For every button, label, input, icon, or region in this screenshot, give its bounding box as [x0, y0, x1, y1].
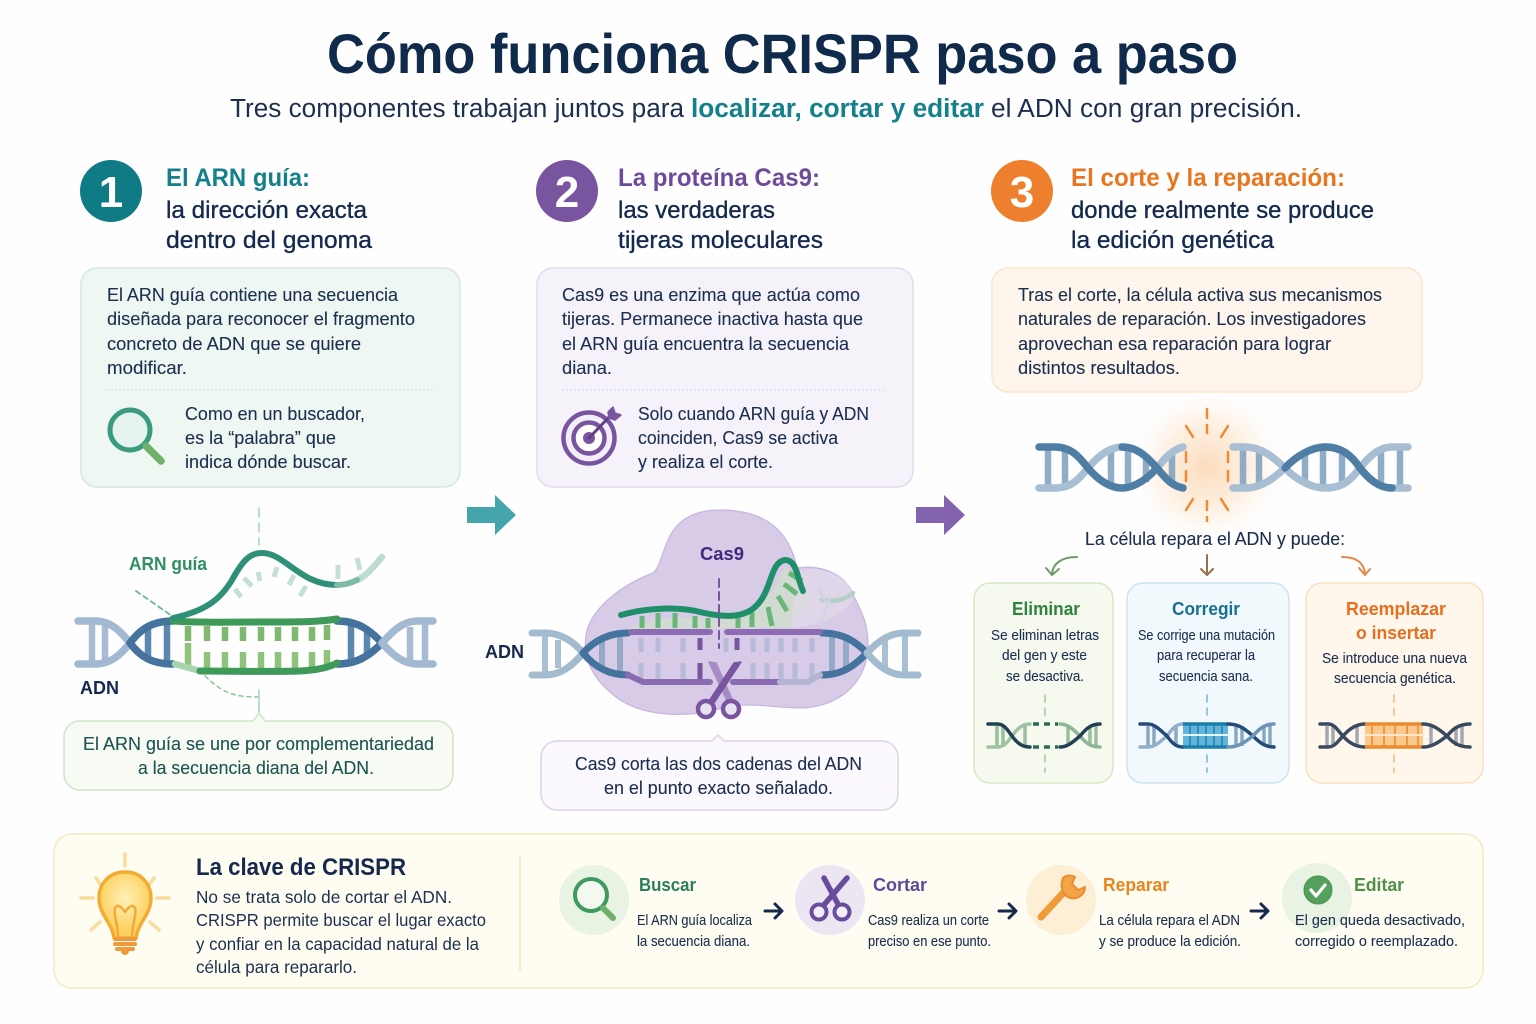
- cut marks: [1186, 409, 1228, 521]
- card: Eliminar: se desactiva.: [1006, 669, 1084, 685]
- ARN strand: [235, 558, 360, 597]
- card: Reemplazar: Se introduce una nueva: [1322, 651, 1468, 667]
- panel: ARN guía text: diseñada para reconocer el fragmento: [107, 308, 415, 329]
- step number 2: 2: [555, 168, 579, 217]
- arrow: to Eliminar: [1046, 557, 1077, 575]
- analogy text 2: Solo cuando ARN guía y ADN: [638, 403, 869, 424]
- heading 1: la dirección exacta: [166, 197, 368, 224]
- title: Cómo funciona CRISPR paso a paso: [327, 22, 1238, 85]
- left helix: [78, 621, 173, 664]
- icon: magnifier: [110, 410, 161, 461]
- panel: ARN guía text: concreto de ADN que se quiere: [107, 333, 361, 354]
- arrow: teal: [467, 495, 516, 535]
- label: ARN guía: ARN guía: [129, 554, 208, 574]
- callout 2: Cas9 corta las dos cadenas del ADN: [575, 753, 862, 774]
- card: Corregir: [1127, 583, 1289, 783]
- arrow: step 2 to 3: [999, 904, 1016, 918]
- analogy text 1: indica dónde buscar.: [185, 451, 351, 472]
- label: Cas9: Cas9: [700, 544, 744, 564]
- cut strands: [631, 629, 820, 635]
- panel: La clave de CRISPR: [54, 834, 1483, 988]
- diagram: Cas9 cutting ADN: [532, 510, 918, 717]
- green rungs: [188, 625, 327, 641]
- heading 2: [618, 164, 823, 254]
- card: Reemplazar: secuencia genética.: [1334, 671, 1456, 687]
- callout 1: [64, 713, 453, 790]
- internal rungs: [641, 638, 812, 680]
- icon: magnifier small: [575, 879, 613, 918]
- arrow: purple: [916, 495, 965, 535]
- icon: scissors: [812, 878, 850, 920]
- step number 3: [991, 160, 1053, 222]
- panel: Cas9 text: diana.: [562, 357, 612, 378]
- target strand: [173, 619, 337, 622]
- arrow: step 1 to 2: [765, 904, 782, 918]
- panel: Cas9 text: tijeras. Permanece inactiva hasta que: [562, 308, 863, 329]
- callout 2: [541, 735, 898, 810]
- left fragment: [1039, 447, 1183, 488]
- icon: wrench: [1041, 876, 1085, 917]
- heading 1: [166, 164, 373, 254]
- card: Reemplazar: o insertar: [1356, 623, 1436, 643]
- key text: CRISPR permite buscar el lugar exacto: [196, 910, 486, 930]
- right fragment: [1233, 447, 1408, 488]
- step: Buscar: la secuencia diana.: [637, 934, 750, 950]
- heading 3: El corte y la reparación:: [1071, 164, 1345, 192]
- icon: light bulb: [81, 854, 169, 955]
- step: Reparar: [1026, 865, 1241, 950]
- callout 1: El ARN guía se une por complementariedad: [83, 733, 434, 754]
- repair text: La célula repara el ADN y puede:: [1085, 528, 1345, 549]
- heading 2: La proteína Cas9:: [618, 164, 820, 192]
- panel: ARN guía text: [81, 268, 460, 487]
- heading 2: tijeras moleculares: [618, 227, 823, 254]
- step: Cortar: Cas9 realiza un corte: [868, 913, 989, 929]
- key text: célula para repararlo.: [196, 957, 357, 977]
- step: Buscar: [559, 865, 753, 950]
- card: Corregir: secuencia sana.: [1159, 669, 1253, 685]
- key text: y confiar en la capacidad natural de la: [196, 934, 479, 954]
- key text: La clave de CRISPR: [196, 854, 406, 881]
- panel: reparación text: [992, 268, 1422, 392]
- callout 1: a la secuencia diana del ADN.: [138, 757, 374, 778]
- step number 1: 1: [99, 168, 123, 217]
- ARN rungs: [642, 573, 802, 628]
- step: Reparar: La célula repara el ADN: [1099, 913, 1240, 929]
- analogy text 2: [638, 403, 869, 472]
- key text: [196, 854, 486, 977]
- panel: reparación text: aprovechan esa reparación para lograr: [1018, 333, 1331, 354]
- analogy text 1: Como en un buscador,: [185, 403, 365, 424]
- callout 2: en el punto exacto señalado.: [604, 777, 833, 798]
- panel: reparación text: Tras el corte, la célula activa sus mecanismos: [1018, 284, 1382, 305]
- analogy text 2: coinciden, Cas9 se activa: [638, 427, 839, 448]
- column 2: Cas9: [485, 160, 918, 810]
- card: Eliminar: Se eliminan letras: [991, 628, 1099, 644]
- right helix: [337, 621, 433, 664]
- step: Cortar: [795, 865, 991, 950]
- label: ADN: ADN: [80, 678, 119, 698]
- panel: reparación text: naturales de reparación. Los investigadores: [1018, 308, 1366, 329]
- subtitle: Tres componentes trabajan juntos para: [230, 95, 685, 123]
- step: Editar: corregido o reemplazado.: [1295, 934, 1458, 950]
- diagram: ARN guía binding to ADN: [78, 508, 433, 722]
- analogy text 1: [185, 403, 365, 472]
- panel: Cas9 text: el ARN guía encuentra la secuencia: [562, 333, 850, 354]
- step number 3: 3: [1010, 168, 1034, 217]
- panel: Cas9 text: Cas9 es una enzima que actúa como: [562, 284, 860, 305]
- step: Reparar: Reparar: [1103, 875, 1169, 895]
- step: Cortar: preciso en ese punto.: [868, 934, 991, 950]
- step number 1: [80, 160, 142, 222]
- card: Eliminar: [974, 583, 1113, 783]
- card: Eliminar: del gen y este: [1002, 648, 1087, 664]
- arrow: step 3 to 4: [1251, 904, 1268, 918]
- icon: target: [564, 407, 621, 464]
- scissors: [698, 662, 741, 717]
- left and right helix: [532, 633, 918, 675]
- heading 1: El ARN guía:: [166, 164, 310, 192]
- cut line: [718, 579, 720, 648]
- step: Editar: Editar: [1354, 875, 1404, 895]
- heading 3: [1071, 164, 1374, 254]
- ARN strand: [621, 560, 803, 616]
- panel: ARN guía text: modificar.: [107, 357, 187, 378]
- icon: check: [1304, 876, 1332, 904]
- card: Eliminar: Eliminar: [1012, 599, 1080, 619]
- analogy text 1: es la “palabra” que: [185, 427, 336, 448]
- analogy text 2: y realiza el corte.: [638, 451, 773, 472]
- heading 1: dentro del genoma: [166, 227, 373, 254]
- subtitle: el ADN con gran precisión.: [991, 95, 1302, 123]
- mini ADN: deletion: [988, 695, 1100, 772]
- Cas9 protein: [585, 510, 868, 714]
- step: Cortar: Cortar: [873, 875, 927, 895]
- mini ADN: correction: [1140, 695, 1274, 772]
- mini ADN: insertion: [1320, 695, 1470, 772]
- step: Editar: [1282, 863, 1465, 950]
- heading 3: donde realmente se produce: [1071, 197, 1374, 224]
- step: Buscar: El ARN guía localiza: [637, 913, 753, 929]
- column 1: ARN guía: [64, 160, 460, 790]
- heading 3: la edición genética: [1071, 227, 1275, 254]
- step: Buscar: Buscar: [639, 875, 696, 895]
- card: Corregir: para recuperar la: [1157, 648, 1256, 664]
- step: Editar: El gen queda desactivado,: [1295, 913, 1465, 929]
- panel: ARN guía text: El ARN guía contiene una secuencia: [107, 284, 399, 305]
- arrow: to Corregir: [1201, 555, 1213, 575]
- subtitle: [230, 95, 1302, 123]
- card: Reemplazar: [1306, 583, 1483, 783]
- heading 2: las verdaderas: [618, 197, 775, 224]
- subtitle: localizar, cortar y editar: [691, 95, 984, 123]
- panel: Cas9 text: [537, 268, 913, 487]
- step: Reparar: y se produce la edición.: [1099, 934, 1241, 950]
- diagram: cut ADN: [1039, 395, 1408, 539]
- card: Corregir: Se corrige una mutación: [1138, 628, 1275, 644]
- column 3: corte y reparación: [974, 160, 1483, 783]
- card: Reemplazar: Reemplazar: [1346, 599, 1446, 619]
- key text: No se trata solo de cortar el ADN.: [196, 887, 452, 907]
- label: ADN: ADN: [485, 642, 524, 662]
- step number 2: [536, 160, 598, 222]
- card: Corregir: Corregir: [1172, 599, 1240, 619]
- arrow: to Reemplazar: [1342, 557, 1370, 575]
- panel: reparación text: distintos resultados.: [1018, 357, 1180, 378]
